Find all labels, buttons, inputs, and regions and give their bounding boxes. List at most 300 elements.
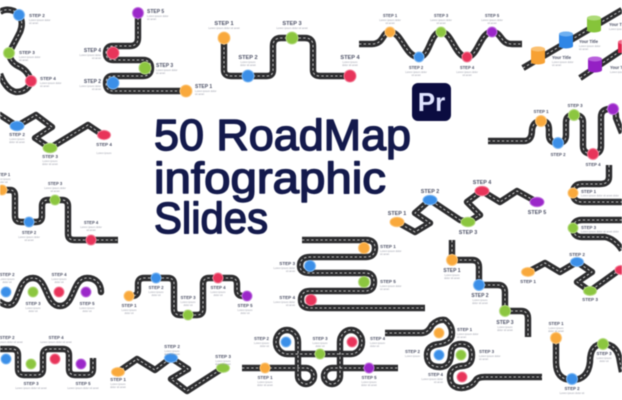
label: step 3: Lorem ipsum dolor <box>44 186 66 190</box>
label: step 4: Lorem ipsum dolor sit amet <box>40 340 72 344</box>
label: step 1: Lorem ipsum dolor <box>195 89 217 93</box>
label: step 4: STEP 4 <box>210 285 226 290</box>
label: step 2: Lorem ipsum dolor <box>29 18 51 22</box>
label: step 2: STEP 2 <box>29 13 45 18</box>
label: step 2: sit amet <box>411 73 421 77</box>
marker: step 1 <box>218 32 230 44</box>
road <box>528 262 622 291</box>
road <box>2 190 118 240</box>
label: step 3: STEP 3 <box>279 261 295 266</box>
label: title 1: Your Title <box>552 55 571 60</box>
label: step 1: dolor sit amet <box>257 383 273 387</box>
label: step 1: STEP 1 <box>121 303 137 308</box>
marker: step 2 <box>10 121 24 131</box>
panel: roadmap top right wave <box>488 103 622 167</box>
label: step 2: STEP 2 <box>564 386 580 391</box>
marker: step 1 <box>124 291 134 301</box>
label: step 2: STEP 2 <box>148 285 164 290</box>
marker: step 4 <box>615 266 622 274</box>
marker: step 4 <box>50 354 60 364</box>
label: step 3: STEP 3 <box>48 181 62 186</box>
marker: step 3 <box>286 32 298 44</box>
marker: step 3 <box>50 195 60 205</box>
label: step 4: sit amet <box>86 228 96 232</box>
label: step 1: sit amet <box>385 21 395 25</box>
label: step 3: STEP 3 <box>156 63 173 69</box>
marker: step 3 <box>315 349 325 359</box>
panel: isometric cylinder roadmap <box>523 10 622 78</box>
marker: step 4 <box>475 186 489 196</box>
road lower <box>573 220 622 250</box>
label: step 2: Lorem ipsum <box>148 290 164 294</box>
panel: staircase roadmap <box>443 240 528 337</box>
label: step 4: Lorem ipsum <box>370 341 385 345</box>
panel: square wave roadmap <box>121 273 253 320</box>
title: Slides <box>154 194 268 243</box>
panel: wave roadmap top <box>359 13 522 77</box>
label: step 4: sit amet <box>92 56 101 60</box>
label: step 2: Lorem ipsum dolor <box>405 70 427 74</box>
label: step 3: Lorem ipsum dolor <box>430 18 452 22</box>
label: step 1: Lorem ipsum dolor sit amet <box>208 26 240 30</box>
label: step 2: STEP 2 <box>84 79 101 85</box>
road <box>224 38 350 76</box>
road <box>488 109 622 154</box>
label: step 2: dolor sit <box>260 344 269 348</box>
road upper <box>573 165 622 202</box>
label: step 4: STEP 4 <box>84 48 101 54</box>
marker: step 1 <box>568 188 578 198</box>
label: step 4: STEP 4 <box>340 55 360 61</box>
label: step 3: STEP 3 <box>496 320 514 326</box>
marker: step 1 <box>390 217 404 227</box>
label: step 2: dolor sit amet <box>240 63 256 67</box>
label: step 3: STEP 3 <box>25 301 41 306</box>
label: step 1: Lorem ipsum dolor <box>457 332 479 336</box>
label: step 1: Lorem ipsum dolor <box>380 249 402 253</box>
marker: step 5 <box>608 104 618 114</box>
label: title 1: sit amet <box>552 63 561 67</box>
road <box>556 338 622 380</box>
marker: step 1 <box>522 268 534 276</box>
label: step 4: sit amet <box>286 303 295 307</box>
label: step 2: dolor sit amet <box>164 352 180 356</box>
marker: step 3 <box>500 306 510 316</box>
marker: step 4 <box>98 130 110 140</box>
label: step 5: STEP 5 <box>361 375 377 380</box>
panel: looped roadmap bottom right <box>385 320 542 388</box>
panel: serpentine roadmap centre <box>274 240 425 308</box>
panel: roadmap left middle <box>0 172 118 245</box>
label: step 4: Lorem ipsum dolor <box>40 81 62 85</box>
marker: purple cylinder <box>588 56 602 72</box>
panel: roadmap top left <box>0 10 62 92</box>
marker: step 1 <box>180 85 192 97</box>
label: step 4: Lorem ipsum dolor <box>274 300 295 304</box>
marker: step 3 <box>461 217 475 227</box>
label: step 1: Lorem ipsum <box>444 273 460 277</box>
marker: step 4 <box>54 287 64 297</box>
marker: step 1 <box>385 27 395 37</box>
label: step 5: Lorem ipsum <box>362 380 376 384</box>
marker: step 3 <box>28 287 38 297</box>
label: step 3: STEP 3 <box>459 230 477 236</box>
icon: Premiere Pro badge <box>412 83 451 121</box>
label: step 3: Lorem ipsum dolor sit amet <box>276 26 308 30</box>
label: step 3: Lorem ipsum dolor <box>479 354 501 358</box>
marker: step 1 <box>536 116 546 126</box>
marker: step 3 <box>4 48 14 58</box>
road <box>118 358 223 391</box>
label: step 1: STEP 1 <box>548 321 564 326</box>
label: step 3: dolor sit <box>315 344 325 348</box>
road <box>106 13 186 91</box>
label: step 2: sit amet <box>92 87 101 91</box>
road <box>0 10 31 92</box>
label: step 2: STEP 2 <box>569 252 585 257</box>
label: step 3: sit amet <box>156 71 165 75</box>
marker: step 2 <box>423 195 437 205</box>
label: step 1: STEP 1 <box>257 375 273 380</box>
marker: step 1 <box>112 368 124 376</box>
label: step 3: sit amet <box>19 58 28 62</box>
marker: step 2 <box>1 287 11 297</box>
road <box>129 278 247 315</box>
marker: step 1 <box>0 185 7 195</box>
label: step 5: STEP 5 <box>528 210 546 216</box>
label: step 3: STEP 3 <box>42 154 58 159</box>
label: step 2: STEP 2 <box>9 132 25 137</box>
label: step 3: STEP 3 <box>180 295 196 300</box>
label: step 1: STEP 1 <box>457 327 472 332</box>
label: step 1: dolor sit amet <box>444 276 460 280</box>
marker: step 5 <box>530 197 544 207</box>
label: step 3: STEP 3 <box>23 381 39 386</box>
label: step 2: STEP 2 <box>421 189 439 195</box>
marker: step 2 <box>164 354 178 362</box>
marker: step 3 <box>26 359 36 369</box>
label: step 3: Lorem ipsum dolor sit amet dolor <box>581 230 619 234</box>
marker: step 4 <box>86 235 96 245</box>
label: step 3: sit amet <box>436 21 446 25</box>
panel: serpentine roadmap far right <box>568 165 622 250</box>
road <box>397 191 537 232</box>
label: step 3: sit amet <box>50 189 60 193</box>
label: step 3: STEP 3 <box>19 50 35 55</box>
label: step 3: sit amet <box>286 269 295 273</box>
marker: step 4 <box>213 273 223 283</box>
marker: step 4 <box>462 52 472 62</box>
road <box>0 349 93 375</box>
title: 50 RoadMap <box>154 111 411 160</box>
panel: roadmap serpentine top <box>80 8 217 97</box>
label: step 3: dolor sit amet <box>497 328 513 332</box>
label: step 3: Lorem ipsum <box>180 300 196 304</box>
label: step 4: dolor sit <box>370 344 379 348</box>
marker: green cylinder <box>587 16 601 32</box>
label: step 3: Lorem ipsum <box>42 159 58 163</box>
road upper <box>523 10 622 68</box>
label: step 5: Lorem ipsum <box>80 306 94 310</box>
marker: step 3 <box>584 286 596 296</box>
label: step 2: Lorem ipsum dolor sit <box>560 391 585 395</box>
label: step 5: STEP 5 <box>79 301 95 306</box>
label: step 5: Lorem ipsum dolor sit amet <box>67 386 99 390</box>
label: step 3: Lorem ipsum dolor <box>19 55 41 59</box>
label: step 4: Lorem ipsum dolor <box>422 377 443 381</box>
label: step 3: Lorem ipsum <box>498 325 512 329</box>
panel: zigzag roadmap left <box>0 115 112 166</box>
label: step 1: Lorem ipsum <box>110 382 126 386</box>
label: step 1: STEP 1 <box>388 211 406 217</box>
label: step 4: STEP 4 <box>51 272 67 277</box>
marker: step 4 <box>344 70 356 82</box>
label: step 2: Lorem ipsum <box>10 137 24 141</box>
road <box>452 240 528 337</box>
label: step 4: sit amet <box>40 84 49 88</box>
label: step 3: dolor sit <box>599 359 609 363</box>
label: step 5: sit amet <box>380 287 389 291</box>
label: step 3: dolor sit amet <box>42 162 58 166</box>
label: step 4: Lorem ipsum dolor <box>80 225 102 229</box>
marker: step 2 <box>434 350 444 360</box>
label: step 2: STEP 2 <box>550 152 566 157</box>
label: step 2: Lorem ipsum <box>472 298 488 302</box>
marker: step 3 <box>216 364 230 372</box>
label: step 4: Lorem ipsum dolor <box>456 70 478 74</box>
label: step 2: Lorem ipsum dolor <box>80 84 101 88</box>
marker: step 5 <box>487 27 497 37</box>
label: step 4: STEP 4 <box>40 76 56 81</box>
label: step 1: STEP 1 <box>195 84 212 90</box>
marker: step 5 <box>76 359 86 369</box>
label: step 4: STEP 4 <box>428 372 443 377</box>
label: step 1: Lorem ipsum dolor sit amet dolor <box>581 194 619 198</box>
marker: step 2 <box>414 52 424 62</box>
marker: blue cylinder <box>559 32 573 48</box>
label: step 3: Lorem ipsum dolor <box>156 68 178 72</box>
label: step 3: Lorem ipsum <box>596 356 612 360</box>
label: step 1: dolor sit amet <box>548 329 564 333</box>
label: step 5: dolor sit <box>82 309 92 313</box>
label: title 2: Your Title <box>579 39 598 44</box>
label: step 2: STEP 2 <box>405 349 420 354</box>
panel: U curve roadmap bottom right <box>548 321 622 395</box>
marker: step 3 <box>568 223 578 233</box>
label: step 4: dolor sit <box>213 293 223 297</box>
label: step 3: STEP 3 <box>434 13 448 18</box>
marker: step 2 <box>570 258 584 266</box>
label: step 2: Lorem ipsum <box>164 349 180 353</box>
panel: square wave roadmap bottom left <box>0 335 99 390</box>
label: step 1: STEP 1 <box>581 189 596 194</box>
label: title 2: Lorem ipsum dolor <box>579 44 601 48</box>
label: step 4: dolor sit amet <box>342 63 358 67</box>
marker: step 4 <box>347 337 357 347</box>
marker: step 2 <box>566 374 578 384</box>
label: step 5: Lorem ipsum dolor <box>380 284 402 288</box>
label: step 4: STEP 4 <box>96 142 112 147</box>
marker: step 1 <box>550 332 562 344</box>
panel: zigzag roadmap centre right <box>388 180 546 236</box>
label: step 2: Lorem ipsum <box>254 341 269 345</box>
label: step 5: Lorem ipsum dolor <box>147 14 169 18</box>
label: step 5: Lorem ipsum <box>238 308 252 312</box>
marker: step 3 <box>598 338 608 350</box>
road <box>242 330 398 384</box>
label: step 3: sit amet <box>479 357 488 361</box>
road <box>0 278 101 306</box>
label: step 2: dolor sit <box>151 293 161 297</box>
label: step 4: Lorem ipsum <box>96 151 112 155</box>
marker: step 2 <box>24 217 34 227</box>
marker: step 1 <box>358 242 370 254</box>
label: step 3: STEP 3 <box>215 354 231 359</box>
label: step 3: dolor sit <box>28 309 38 313</box>
label: step 3: STEP 3 <box>479 349 494 354</box>
road <box>385 320 542 388</box>
marker: step 3 <box>183 310 193 320</box>
marker: step 5 <box>358 276 370 288</box>
label: step 5: sit amet <box>147 17 156 21</box>
label: step 2: Lorem ipsum <box>240 60 256 64</box>
icon: Premiere Pro badge: Pr <box>418 87 445 117</box>
label: step 5: dolor sit <box>240 311 250 315</box>
panel: zigzag roadmap bottom <box>110 344 231 391</box>
label: title 2: sit amet <box>579 47 588 51</box>
label: step 3: STEP 3 <box>567 103 583 108</box>
title: infographic <box>154 154 386 203</box>
label: step 4: STEP 4 <box>585 162 601 167</box>
marker: step 2 <box>1 354 11 364</box>
label: step 1: Lorem ipsum <box>548 326 564 330</box>
marker: step 3 <box>568 110 580 120</box>
label: step 1: dolor sit amet <box>110 385 126 389</box>
label: step 4: sit amet <box>434 380 443 384</box>
label: step 2: dolor sit amet <box>472 301 488 305</box>
label: step 4: dolor sit <box>54 280 64 284</box>
label: step 1: STEP 1 <box>380 244 396 249</box>
label: step 1: STEP 1 <box>214 21 234 27</box>
label: step 1: STEP 1 <box>110 377 126 382</box>
label: step 1: STEP 1 <box>443 268 461 274</box>
label: step 4: sit amet <box>462 73 472 77</box>
label: step 5: STEP 5 <box>75 381 91 386</box>
label: step 4: STEP 4 <box>84 220 98 225</box>
label: step 2: STEP 2 <box>409 65 423 70</box>
marker: step 3 <box>436 27 446 37</box>
label: step 1: Lorem ipsum <box>258 380 272 384</box>
label: step 2: sit amet <box>29 21 38 25</box>
marker: step 3 <box>43 143 57 153</box>
marker: step 2 <box>14 10 24 20</box>
panel: zigzag roadmap right <box>520 252 622 302</box>
label: title 1: Lorem ipsum dolor <box>552 60 574 64</box>
label: step 3: STEP 3 <box>596 351 612 356</box>
label: step 3: Lorem ipsum <box>312 341 328 345</box>
label: step 2: dolor sit amet <box>9 140 25 144</box>
label: step 3: dolor sit amet <box>215 362 231 366</box>
label: step 1: Lorem ipsum dolor <box>379 18 401 22</box>
label: step 3: STEP 3 <box>582 297 598 302</box>
label: step 1: sit amet <box>195 92 204 96</box>
marker: step 1 <box>446 254 458 266</box>
marker: step 2 <box>242 70 254 82</box>
marker: step 2 <box>107 77 119 89</box>
label: step 4: STEP 4 <box>370 336 385 341</box>
marker: step 3 <box>304 260 316 272</box>
title <box>154 111 411 243</box>
marker: step 4 <box>107 47 119 59</box>
label: step 3: STEP 3 <box>312 336 328 341</box>
marker: step 5 <box>132 8 144 18</box>
marker: step 1 <box>434 328 444 338</box>
marker: red cylinder <box>618 40 622 53</box>
label: step 4: Lorem ipsum <box>210 290 226 294</box>
label: step 1: STEP 1 <box>520 279 536 284</box>
panel: wave roadmap bottom left <box>0 272 101 313</box>
marker: step 5 <box>364 363 374 373</box>
marker: orange cylinder <box>531 46 545 64</box>
marker: step 2 <box>552 138 564 148</box>
label: step 2: STEP 2 <box>164 344 180 349</box>
label: step 2: Lorem ipsum <box>405 354 420 358</box>
label: step 1: sit amet <box>380 252 389 256</box>
label: step 4: STEP 4 <box>279 295 295 300</box>
label: step 3: STEP 3 <box>282 21 302 27</box>
label: step 4: STEP 4 <box>473 180 491 186</box>
road <box>359 32 522 57</box>
label: step 5: Lorem ipsum dolor <box>481 18 503 22</box>
panel: roadmap top centre <box>208 21 360 82</box>
label: step 1: STEP 1 <box>383 13 397 18</box>
label: step 5: STEP 5 <box>485 13 499 18</box>
label: step 4: Lorem ipsum dolor <box>80 53 101 57</box>
label: step 5: STEP 5 <box>237 303 253 308</box>
label: step 2: STEP 2 <box>22 230 36 235</box>
label: step 4: Lorem ipsum <box>342 60 358 64</box>
marker: step 4 <box>306 294 316 306</box>
road <box>0 115 103 148</box>
label: step 1: STEP 1 <box>533 109 549 114</box>
label: step 5: STEP 5 <box>380 279 396 284</box>
label: step 4: STEP 4 <box>48 335 64 340</box>
label: step 2: STEP 2 <box>254 336 269 341</box>
marker: step 4 <box>26 76 36 86</box>
label: step 1: Lorem ipsum <box>122 308 136 312</box>
label: step 1: sit amet <box>457 335 466 339</box>
marker: step 2 <box>281 337 291 347</box>
label: step 2: dolor sit <box>2 280 12 284</box>
marker: step 5 <box>81 287 91 297</box>
label: step 5: sit amet <box>487 21 497 25</box>
label: step 3: dolor sit <box>183 303 193 307</box>
road lower <box>580 50 622 78</box>
label: step 2: STEP 2 <box>238 55 258 61</box>
marker: step 2 <box>474 280 484 290</box>
marker: step 3 <box>139 62 151 74</box>
label: step 2: STEP 2 <box>471 293 489 299</box>
label: step 5: STEP 5 <box>147 9 164 15</box>
panel: loop knot roadmap bottom centre <box>242 330 398 387</box>
marker: step 4 <box>588 148 598 160</box>
label: step 3: STEP 3 <box>581 225 596 230</box>
marker: step 5 <box>242 291 252 301</box>
label: step 1: dolor sit <box>124 311 134 315</box>
road <box>300 240 425 308</box>
marker: step 3 <box>456 350 466 360</box>
marker: step 2 <box>151 273 161 283</box>
